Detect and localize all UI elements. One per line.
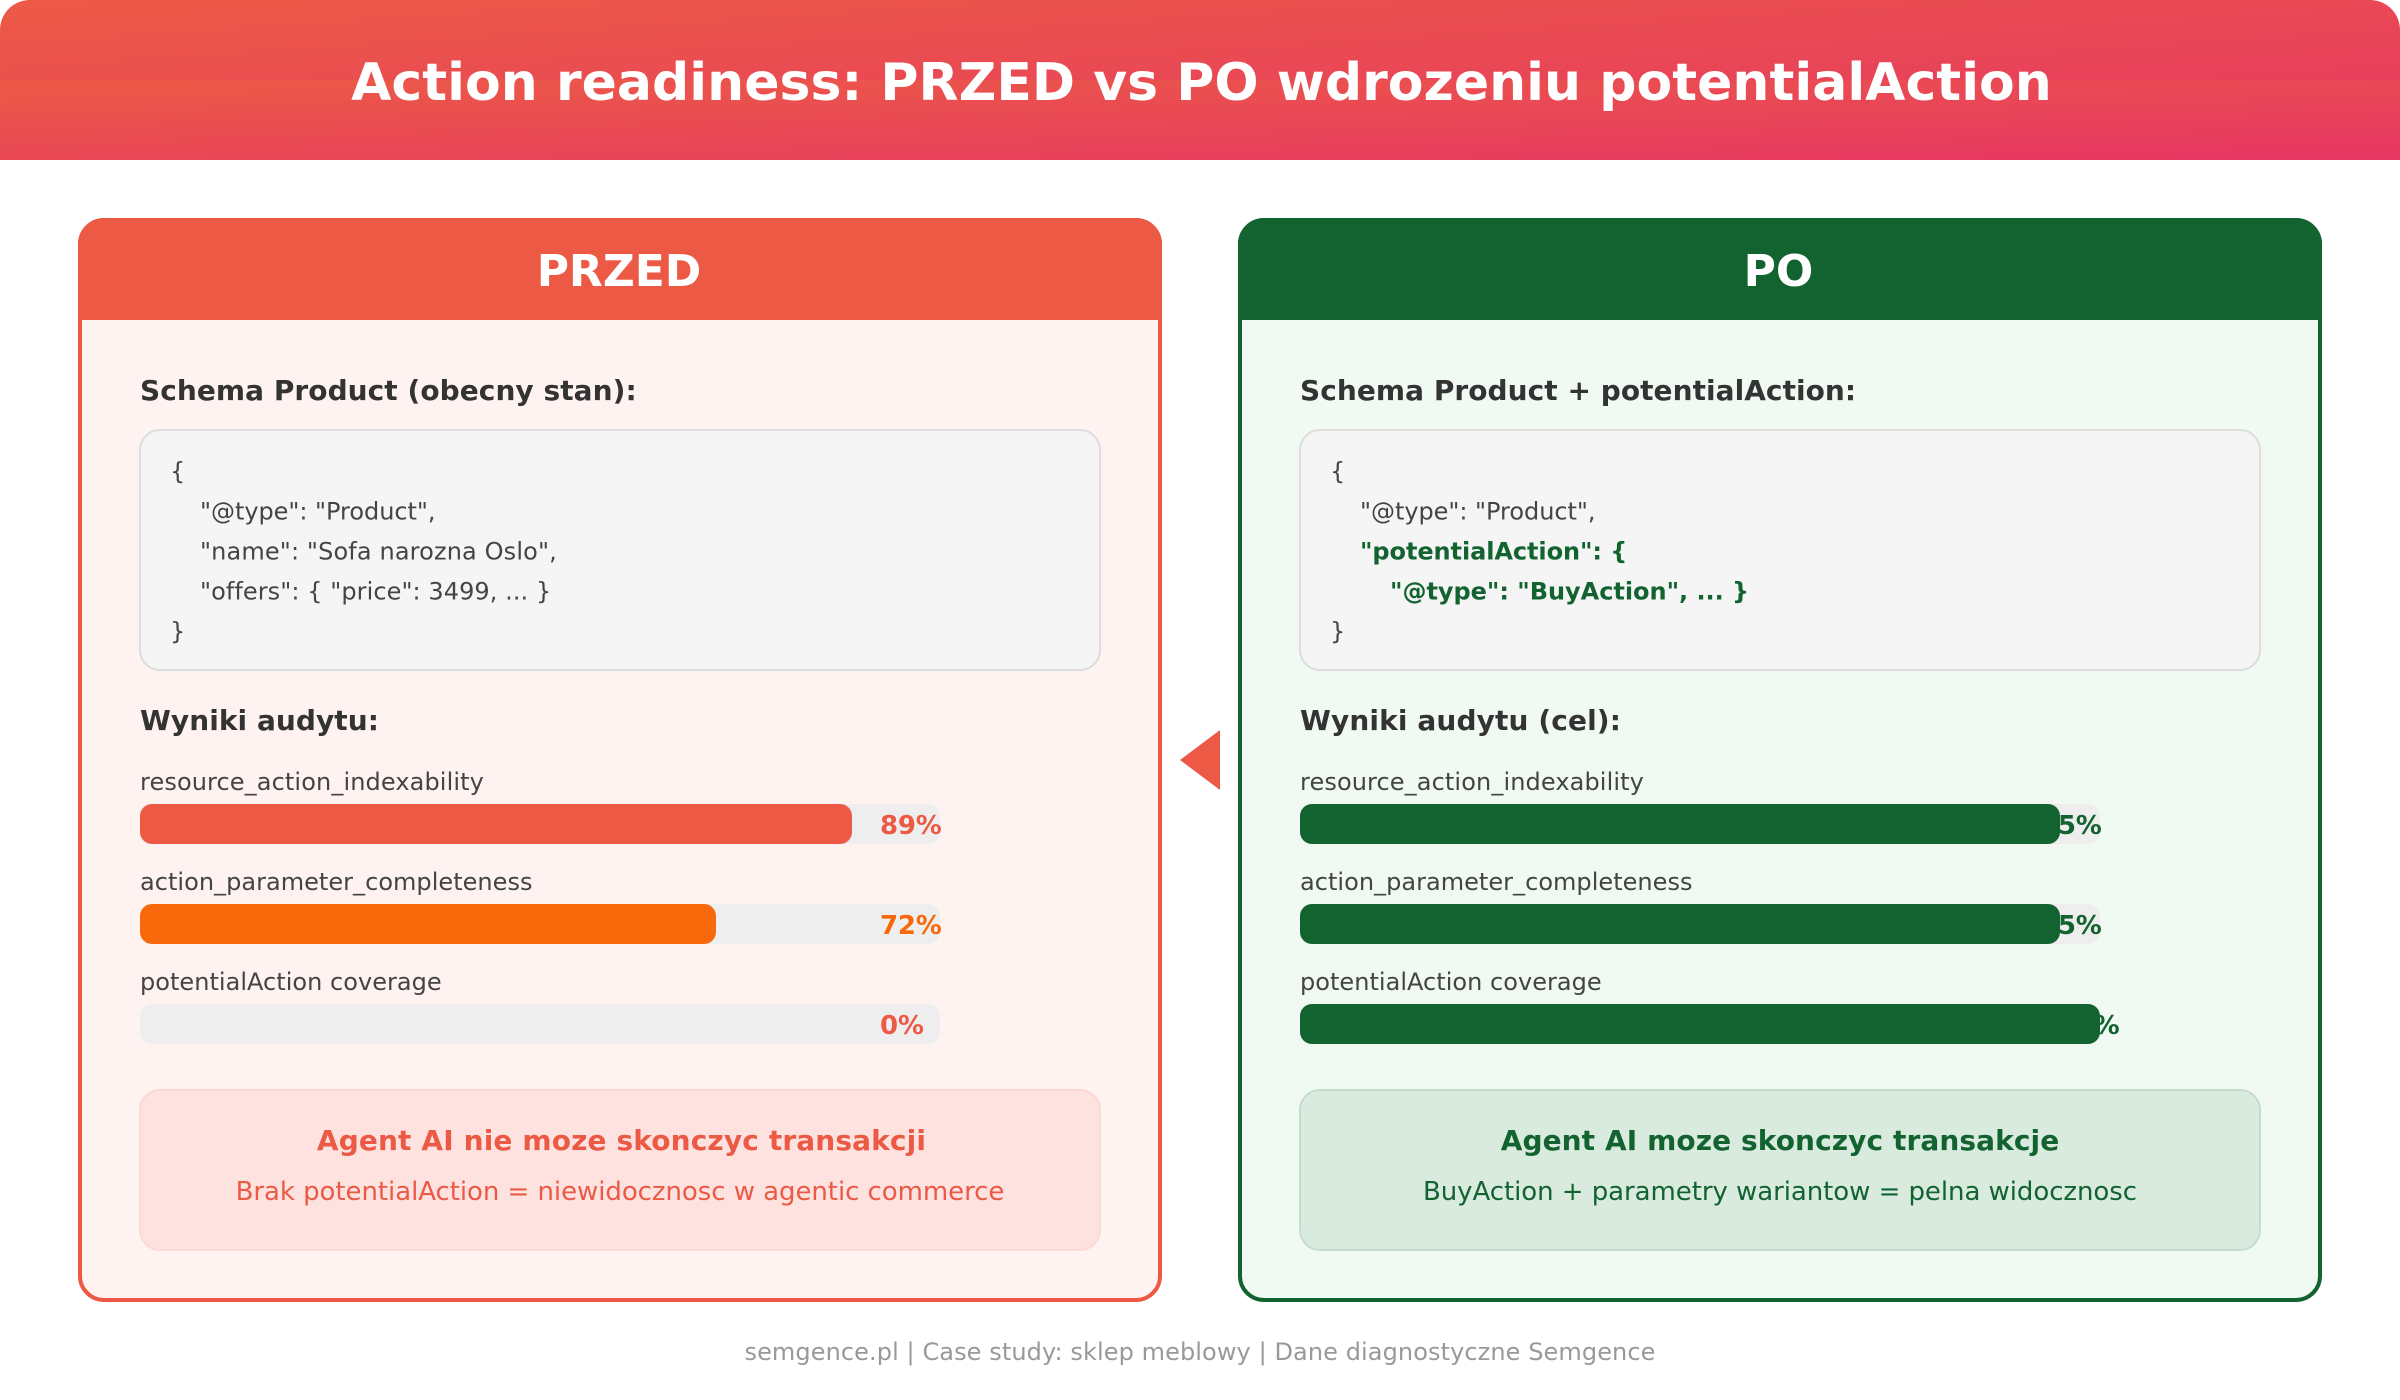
- panel: PRZED: [78, 218, 1162, 1300]
- code block: before: "name": "Sofa narozna Oslo",: [200, 538, 557, 566]
- metric: potentialAction coverage 100%: potentialAction coverage: [1300, 968, 1602, 996]
- code block: before: [140, 430, 1100, 670]
- heading: audit results before: Wyniki audytu:: [140, 704, 379, 737]
- heading: audit results after: Wyniki audytu (cel):: [1300, 704, 1621, 737]
- metric: action_parameter_completeness 95%: [1300, 868, 2102, 944]
- code block: before: }: [170, 618, 185, 646]
- metric: resource_action_indexability 89%: resource_action_indexability: [140, 768, 484, 796]
- metric: action_parameter_completeness 72%: [140, 868, 942, 944]
- title: Action readiness: PRZED vs PO wdrozeniu potentialAction: [351, 53, 2052, 113]
- heading: schema before: Schema Product (obecny stan):: [140, 374, 637, 407]
- code block: before: "offers": { "price": 3499, ... }: [200, 578, 551, 606]
- metric: potentialAction coverage 0%: 0%: [880, 1011, 924, 1041]
- code block: before: "@type": "Product",: [200, 498, 435, 526]
- metric: resource_action_indexability 95%: 95%: [2040, 811, 2102, 841]
- code block: after: "@type": "BuyAction", ... }: [1390, 578, 1749, 606]
- panel: PO: [1238, 218, 2322, 1300]
- callout: after: [1300, 1090, 2260, 1250]
- metric: potentialAction coverage 0%: [140, 968, 940, 1044]
- metric: potentialAction coverage 100%: 100%: [2040, 1011, 2120, 1041]
- callout: before: Brak potentialAction = niewidocznosc w agentic commerce: [236, 1177, 1004, 1207]
- metric: action_parameter_completeness 72%: 72%: [880, 911, 942, 941]
- metric: action_parameter_completeness 95%: action_parameter_completeness: [1300, 868, 1693, 896]
- panel header: PRZED: [78, 218, 1162, 320]
- callout: after: BuyAction + parametry wariantow = pelna widocznosc: [1423, 1177, 2137, 1207]
- code block: before: {: [170, 458, 185, 486]
- metric: resource_action_indexability 95%: [1300, 768, 2102, 844]
- panel header: PRZED: PRZED: [537, 246, 701, 297]
- arrow: [1180, 730, 1220, 790]
- metric: resource_action_indexability 95%: resource_action_indexability: [1300, 768, 1644, 796]
- metric: action_parameter_completeness 95%: 95%: [2040, 911, 2102, 941]
- code block: after: {: [1330, 458, 1345, 486]
- code block: after: "@type": "Product",: [1360, 498, 1595, 526]
- panel header: PO: PO: [1744, 246, 1813, 297]
- header banner: [0, 0, 2400, 160]
- metric: resource_action_indexability 89%: 89%: [880, 811, 942, 841]
- code block: after: }: [1330, 618, 1345, 646]
- panel header: PO: [1238, 218, 2322, 320]
- callout: before: Agent AI nie moze skonczyc transakcji: [317, 1124, 926, 1157]
- code block: after: "potentialAction": {: [1360, 538, 1627, 566]
- code block: after: [1300, 430, 2260, 670]
- heading: schema after: Schema Product + potentialAction:: [1300, 374, 1856, 407]
- callout: after: Agent AI moze skonczyc transakcje: [1501, 1124, 2059, 1157]
- metric: potentialAction coverage 100%: [1300, 968, 2120, 1044]
- metric: potentialAction coverage 0%: potentialAction coverage: [140, 968, 442, 996]
- metric: resource_action_indexability 89%: [140, 768, 942, 844]
- metric: action_parameter_completeness 72%: action_parameter_completeness: [140, 868, 533, 896]
- callout: before: [140, 1090, 1100, 1250]
- footer: semgence.pl | Case study: sklep meblowy | Dane diagnostyczne Semgence: [744, 1338, 1656, 1366]
